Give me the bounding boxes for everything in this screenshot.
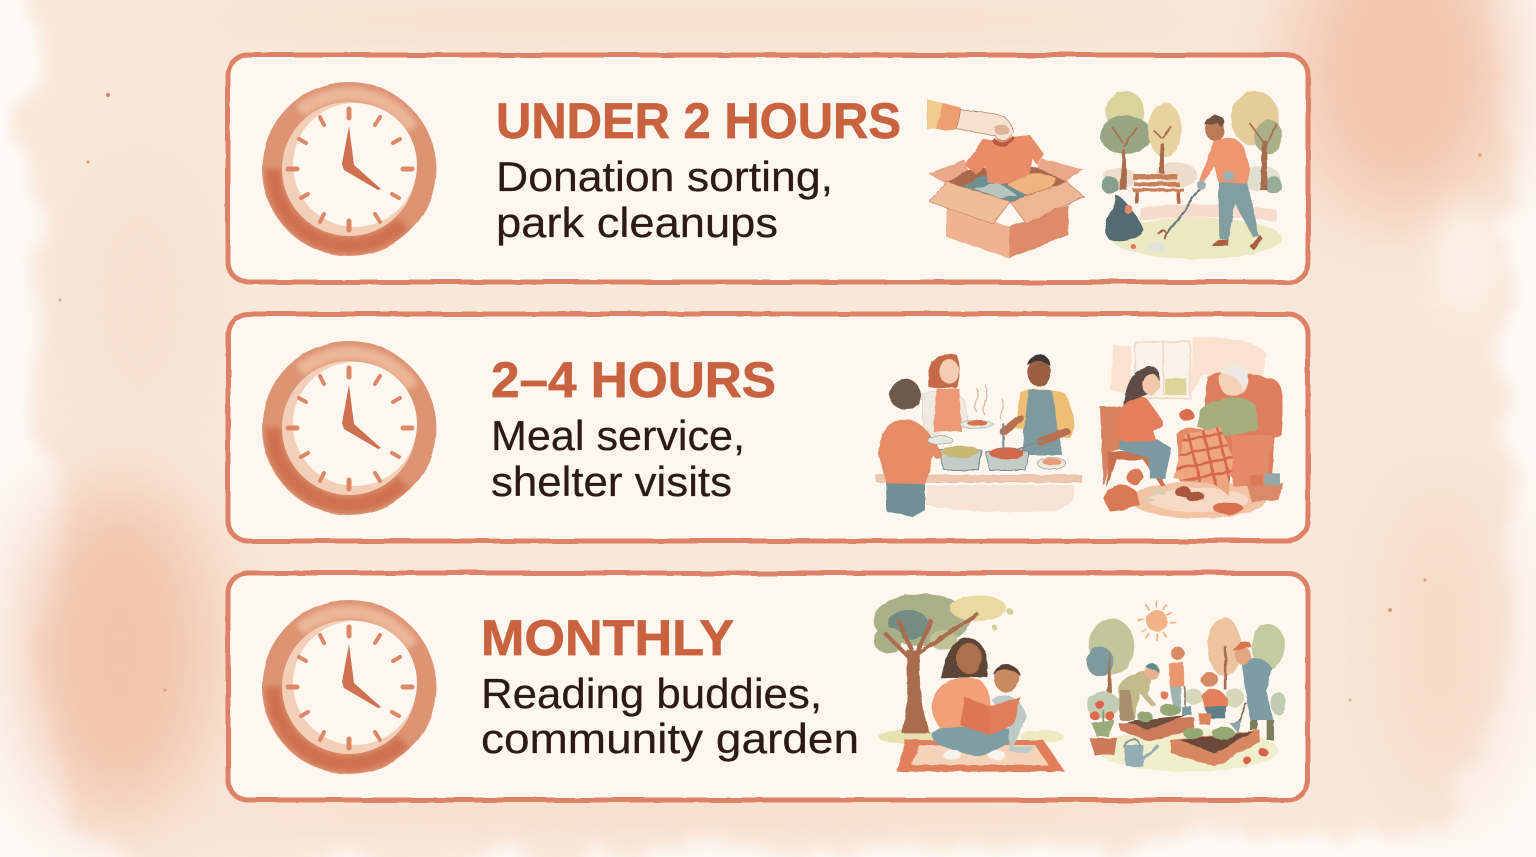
text block: shelter visits — [491, 458, 732, 505]
text block: Donation sorting, — [496, 153, 833, 200]
panel: 2-4 hours — [228, 314, 1308, 541]
illustration: reading under tree — [873, 594, 1065, 772]
text block: park cleanups — [496, 199, 778, 246]
panel: monthly — [228, 573, 1308, 800]
illustration: park cleanup — [1100, 91, 1282, 259]
illustration: meal service — [877, 354, 1082, 517]
text block: Reading buddies, — [481, 670, 822, 717]
icon: clock — [262, 341, 436, 515]
heading: UNDER 2 HOURS — [496, 93, 901, 149]
heading: MONTHLY — [481, 610, 734, 666]
icon: clock — [262, 600, 436, 774]
panel: under 2 hours — [228, 55, 1308, 282]
icon: clock — [262, 82, 436, 256]
text block — [496, 153, 833, 246]
illustration: donation box — [927, 99, 1084, 258]
text block: community garden — [481, 715, 859, 762]
heading: 2–4 HOURS — [491, 352, 776, 408]
text block — [481, 670, 859, 762]
text block: Meal service, — [491, 412, 745, 459]
illustration: shelter visit — [1100, 337, 1283, 518]
illustration: community garden — [1087, 602, 1286, 772]
text block — [491, 412, 745, 505]
